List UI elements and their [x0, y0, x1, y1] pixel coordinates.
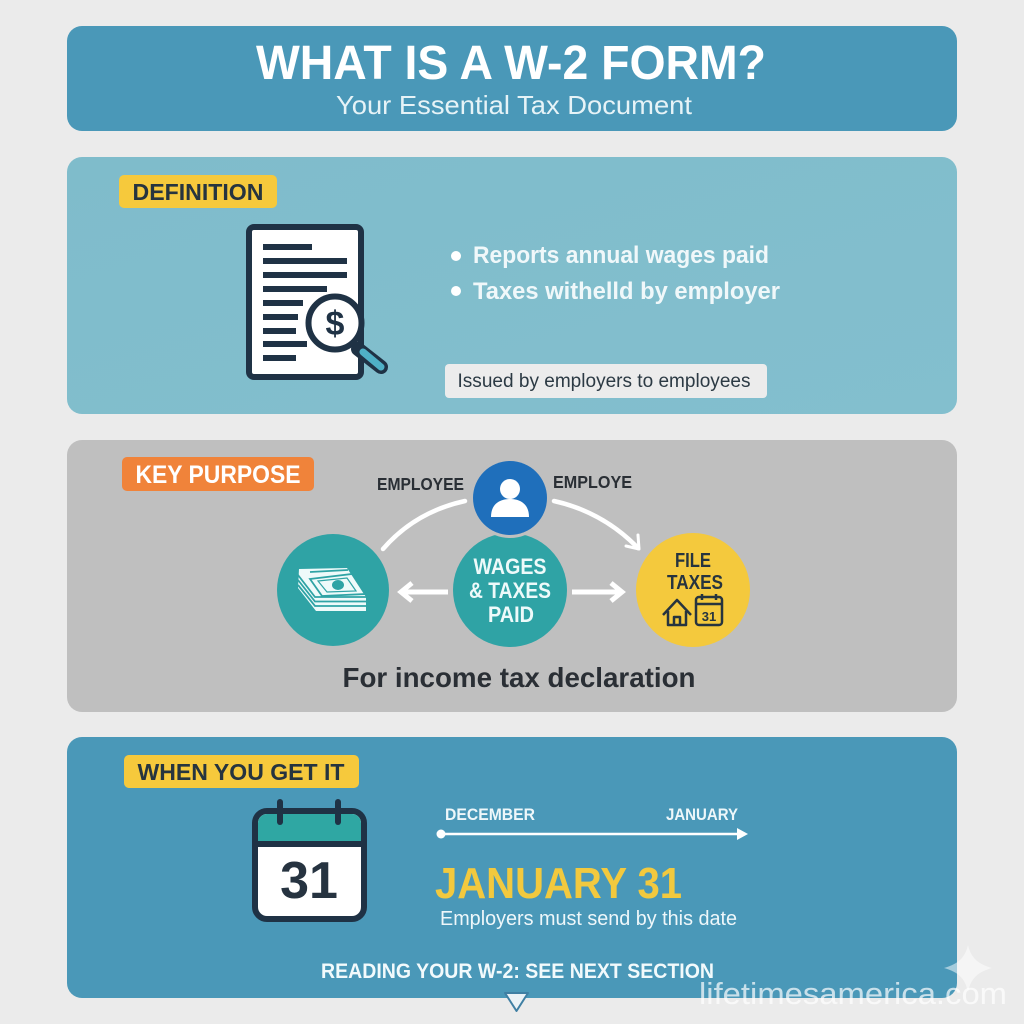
bullet list: Reports annual wages paid	[473, 242, 769, 269]
timeline: JANUARY	[666, 805, 739, 824]
arrow: to money	[401, 583, 448, 601]
timeline	[436, 805, 748, 840]
arrow: to file taxes	[572, 583, 622, 601]
bullet list	[451, 242, 780, 305]
icon: money stack circle	[277, 534, 389, 646]
icon: employee avatar	[470, 458, 550, 538]
badge: key purpose: KEY PURPOSE	[136, 461, 300, 489]
badge: definition: DEFINITION	[132, 179, 264, 205]
text: next section: READING YOUR W-2: SEE NEXT SECTION	[321, 960, 714, 983]
badge: when you get it	[124, 755, 359, 788]
icon: house	[663, 600, 691, 625]
note: issued by employers: Issued by employers to employees	[458, 370, 751, 392]
badge: definition	[119, 175, 277, 208]
icon: calendar	[255, 802, 364, 919]
bullet list: Taxes withelld by employer	[473, 278, 780, 305]
circle: wages and taxes paid: PAID	[488, 602, 534, 627]
label: employe: EMPLOYE	[553, 472, 632, 492]
timeline: DECEMBER	[445, 805, 535, 824]
panel: definition	[67, 157, 957, 414]
circle: wages and taxes paid: WAGES	[474, 554, 546, 579]
note: issued by employers	[445, 364, 767, 398]
subtitle: Your Essential Tax Document	[336, 90, 693, 120]
badge: when you get it: WHEN YOU GET IT	[138, 759, 344, 785]
arrow: next section marker	[505, 993, 528, 1011]
watermark	[699, 945, 1007, 1011]
panel: title banner	[67, 26, 957, 131]
panel: when you get it	[67, 737, 957, 998]
circle: wages and taxes paid: & TAXES	[469, 578, 551, 603]
circle: file taxes: FILE	[675, 550, 711, 572]
watermark: lifetimesamerica.com	[699, 976, 1007, 1011]
circle: wages and taxes paid	[453, 533, 567, 647]
panel: key purpose	[67, 440, 957, 712]
circle: file taxes: TAXES	[667, 572, 723, 594]
arrow: curve to file taxes	[554, 501, 639, 549]
caption: for income tax declaration: For income tax declaration	[342, 662, 696, 693]
circle: file taxes	[636, 533, 750, 647]
icon: calendar: 31	[280, 852, 338, 910]
icon: document with magnifier	[249, 227, 381, 377]
label: employee: EMPLOYEE	[377, 474, 464, 494]
title: WHAT IS A W-2 FORM?	[256, 37, 766, 90]
text: employers must send: Employers must send by this date	[440, 908, 737, 930]
arrow: curve to money	[383, 501, 465, 549]
date: january 31: JANUARY 31	[435, 859, 682, 908]
icon: calendar 31: 31	[702, 609, 716, 624]
icon: document with magnifier: $	[326, 305, 345, 343]
